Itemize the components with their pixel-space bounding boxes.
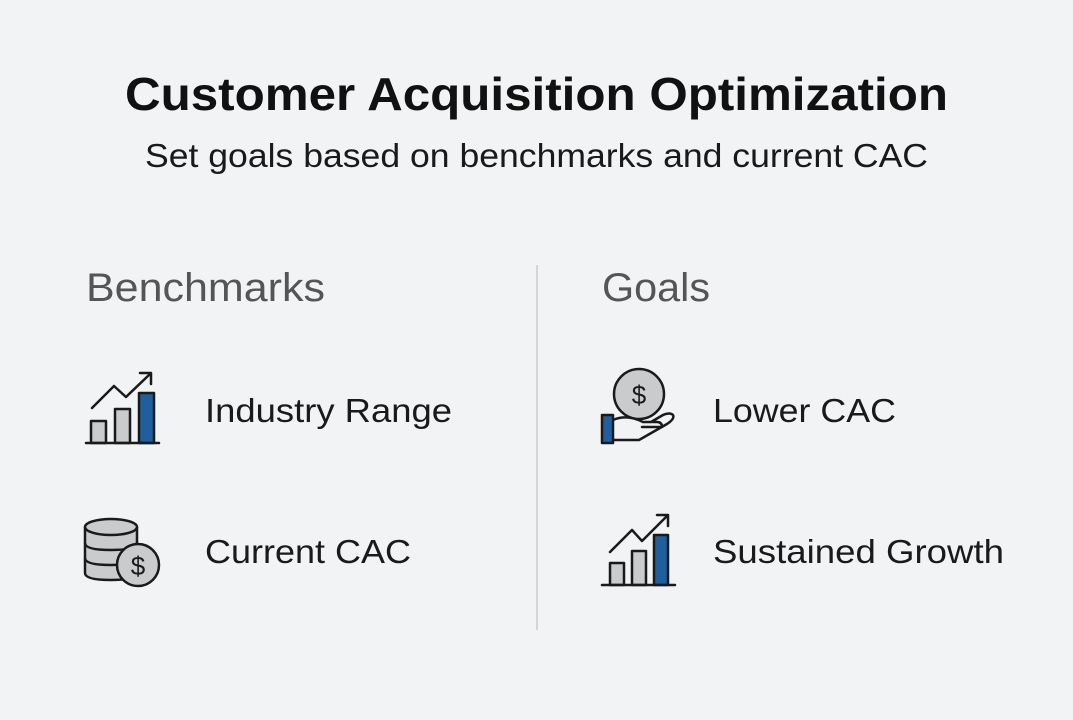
icon: coins with dollar: $ [131,551,146,581]
label: sustained growth: Sustained Growth [713,533,1004,570]
heading: benchmarks: Benchmarks [86,266,325,310]
panel: benchmarks [85,266,452,586]
heading: goals: Goals [602,266,710,310]
label: industry range: Industry Range [205,392,452,429]
icon: hand holding coin: $ [632,380,647,410]
subtitle: Set goals based on benchmarks and current CAC [145,137,928,174]
icon: hand holding coin [602,369,673,443]
icon: bar chart growth [602,515,675,585]
icon: coins with dollar [85,519,159,586]
title: Customer Acquisition Optimization [125,68,948,120]
panel: goals [602,266,1004,585]
label: current CAC: Current CAC [205,533,411,570]
icon: bar chart growth [86,373,159,443]
label: lower CAC: Lower CAC [713,392,896,429]
